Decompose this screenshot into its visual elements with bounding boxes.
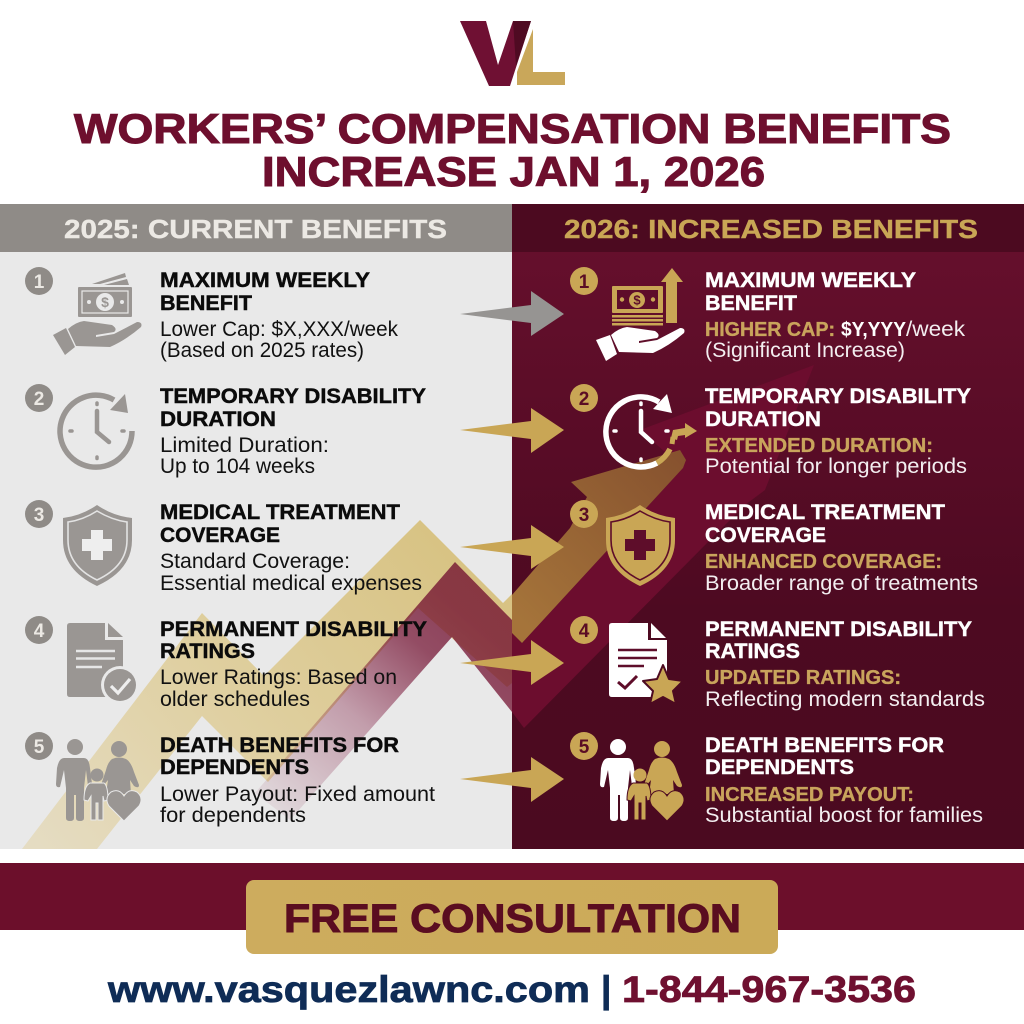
item 1: maximum weekly benefit xyxy=(25,267,398,362)
item 4: permanent disability ratings: RATINGS xyxy=(705,639,800,663)
item 5: death benefits for dependents: 5 xyxy=(34,737,45,758)
item 5: death benefits for dependents: Substantial boost for families xyxy=(705,804,983,827)
item 4: permanent disability ratings: 4 xyxy=(34,621,45,642)
item 1: maximum weekly benefit: MAXIMUM WEEKLY xyxy=(160,268,370,292)
item 1: maximum weekly benefit: /week xyxy=(906,318,966,341)
item 3: medical treatment coverage: COVERAGE xyxy=(705,523,826,547)
item 1: maximum weekly benefit: HIGHER CAP: xyxy=(705,318,835,341)
item 5: death benefits for dependents: DEATH BENEFITS FOR xyxy=(705,733,944,757)
arrow: row 5 xyxy=(460,757,564,802)
item 2: temporary disability duration: 2 xyxy=(579,389,589,410)
item 5: death benefits for dependents: Lower Payout: Fixed amount xyxy=(160,783,435,806)
footer contact line: | xyxy=(601,969,611,1011)
item 2: temporary disability duration: TEMPORARY DISABILITY xyxy=(705,384,971,408)
title: INCREASE JAN 1, 2026 xyxy=(262,148,765,195)
item 4: permanent disability ratings: PERMANENT DISABILITY xyxy=(160,617,427,641)
item 3: medical treatment coverage: COVERAGE xyxy=(160,523,280,547)
item 2: temporary disability duration: DURATION xyxy=(705,407,821,431)
title: WORKERS’ COMPENSATION BENEFITS xyxy=(74,105,951,152)
item 3: medical treatment coverage: Essential medical expenses xyxy=(160,572,422,595)
item 4: permanent disability ratings: 4 xyxy=(579,621,590,642)
item 4: permanent disability ratings: older schedules xyxy=(160,688,310,711)
item 3: medical treatment coverage: Standard Coverage: xyxy=(160,550,350,573)
item 5: death benefits for dependents: 5 xyxy=(579,737,590,758)
item 1: maximum weekly benefit xyxy=(570,267,966,362)
item 3: medical treatment coverage: MEDICAL TREATMENT xyxy=(160,500,400,524)
item 3: medical treatment coverage xyxy=(25,500,422,595)
button: free consultation xyxy=(246,880,778,954)
item 2: temporary disability duration: Up to 104 weeks xyxy=(160,455,315,478)
item 3: medical treatment coverage: MEDICAL TREATMENT xyxy=(705,500,945,524)
item 3: medical treatment coverage: Broader range of treatments xyxy=(705,572,978,595)
panel: 2026 increased benefits xyxy=(512,204,1024,849)
item 4: permanent disability ratings: Reflecting modern standards xyxy=(705,688,985,711)
footer contact line xyxy=(107,969,916,1011)
title xyxy=(74,105,951,195)
item 2: temporary disability duration: EXTENDED DURATION: xyxy=(705,434,933,457)
background rising arrow: right part xyxy=(512,365,814,728)
item 2: temporary disability duration: TEMPORARY DISABILITY xyxy=(160,384,426,408)
item 5: death benefits for dependents: DEPENDENTS xyxy=(705,755,854,779)
item 1: maximum weekly benefit: MAXIMUM WEEKLY xyxy=(705,268,916,292)
item 5: death benefits for dependents xyxy=(25,732,435,827)
item 1: maximum weekly benefit: (Based on 2025 rates) xyxy=(160,339,364,362)
button: free consultation: FREE CONSULTATION xyxy=(284,897,741,941)
item 5: death benefits for dependents: INCREASED PAYOUT: xyxy=(705,783,914,806)
arrow: row 2 xyxy=(460,408,564,453)
item 2: temporary disability duration xyxy=(25,384,426,478)
item 1: maximum weekly benefit: 1 xyxy=(34,272,45,293)
item 4: permanent disability ratings: PERMANENT DISABILITY xyxy=(705,617,972,641)
item 4: permanent disability ratings xyxy=(570,616,985,711)
footer contact line: 1-844-967-3536 xyxy=(622,969,916,1010)
item 1: maximum weekly benefit: 1 xyxy=(579,272,590,293)
background rising arrow: left part xyxy=(22,520,512,849)
item 4: permanent disability ratings xyxy=(25,616,427,711)
item 2: temporary disability duration: Potential for longer periods xyxy=(705,455,967,478)
item 2: temporary disability duration: Limited Duration: xyxy=(160,434,329,457)
item 5: death benefits for dependents: DEPENDENTS xyxy=(160,755,309,779)
item 5: death benefits for dependents xyxy=(570,732,983,827)
arrow: row 4 xyxy=(460,640,564,685)
footer contact line: www.vasquezlawnc.com xyxy=(107,969,590,1010)
item 1: maximum weekly benefit: $ xyxy=(633,292,641,308)
item 1: maximum weekly benefit: Lower Cap: $X,XXX/week xyxy=(160,318,398,341)
item 3: medical treatment coverage xyxy=(570,500,978,595)
item 2: temporary disability duration: DURATION xyxy=(160,407,276,431)
item 5: death benefits for dependents: DEATH BENEFITS FOR xyxy=(160,733,399,757)
heading: 2026 increased benefits: 2026: INCREASED BENEFITS xyxy=(564,214,978,244)
item 4: permanent disability ratings: RATINGS xyxy=(160,639,255,663)
item 3: medical treatment coverage: 3 xyxy=(579,505,589,526)
item 1: maximum weekly benefit: $Y,YYY xyxy=(841,318,906,341)
arrow: row 1 xyxy=(460,291,564,336)
item 3: medical treatment coverage: ENHANCED COVERAGE: xyxy=(705,550,942,573)
item 1: maximum weekly benefit: BENEFIT xyxy=(160,291,252,315)
item 3: medical treatment coverage: 3 xyxy=(34,505,44,526)
item 1: maximum weekly benefit: BENEFIT xyxy=(705,291,797,315)
panel: 2025 current benefits xyxy=(0,204,512,849)
item 2: temporary disability duration: 2 xyxy=(34,389,44,410)
item 1: maximum weekly benefit: $ xyxy=(101,294,109,310)
item 5: death benefits for dependents: for dependents xyxy=(160,804,306,827)
item 4: permanent disability ratings: UPDATED RATINGS: xyxy=(705,666,901,689)
item 4: permanent disability ratings: Lower Ratings: Based on xyxy=(160,666,397,689)
item 1: maximum weekly benefit: (Significant Increase) xyxy=(705,339,905,362)
bottom band xyxy=(0,863,1024,930)
item 2: temporary disability duration xyxy=(570,384,971,478)
logo: VL monogram xyxy=(460,21,565,86)
heading: 2025 current benefits: 2025: CURRENT BENEFITS xyxy=(64,214,447,244)
arrow: row 3 xyxy=(460,525,564,569)
